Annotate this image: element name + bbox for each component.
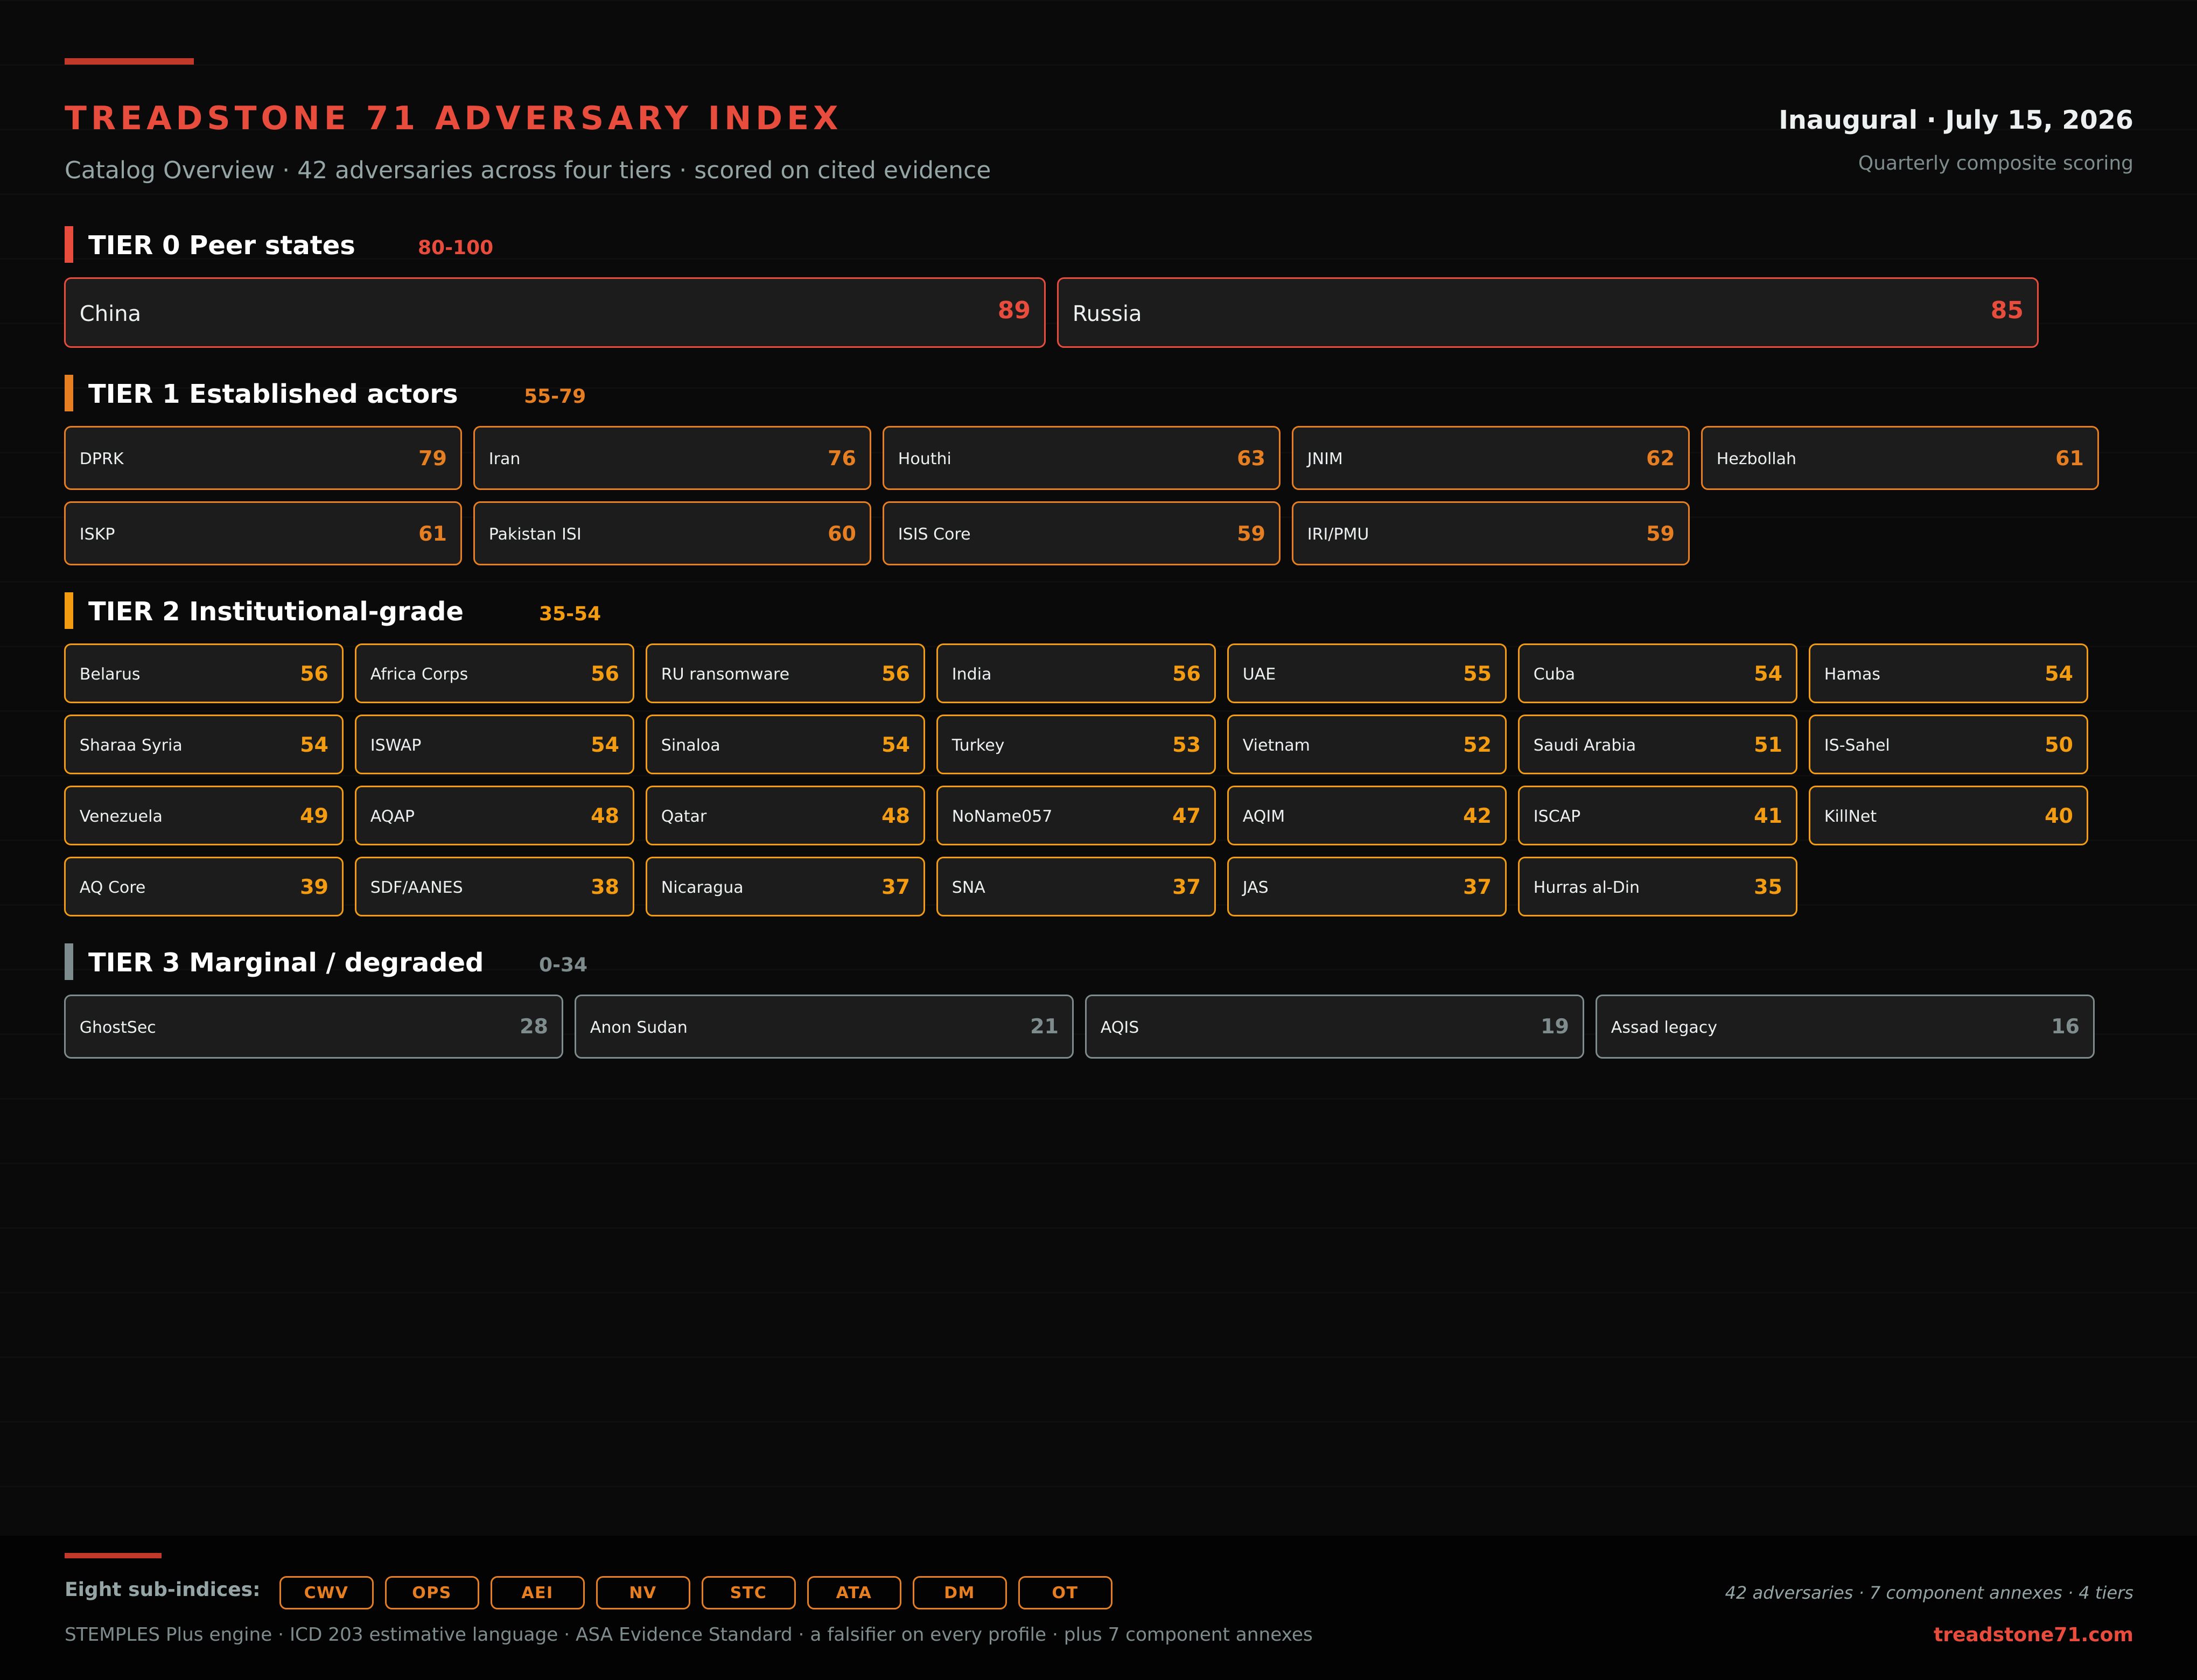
card: Hezbollah: Hezbollah [1717, 449, 1796, 468]
card: Cuba [1517, 643, 1797, 703]
card: Assad legacy: 16 [2051, 1014, 2080, 1038]
card: AQIS: AQIS [1101, 1018, 1139, 1037]
card: ISCAP: ISCAP [1534, 807, 1580, 826]
tier 0 heading: TIER 0 Peer states [88, 230, 355, 261]
card: Iran: Iran [489, 449, 520, 468]
card: Hezbollah: 61 [2055, 446, 2084, 470]
card: IS-Sahel: IS-Sahel [1824, 736, 1890, 755]
card: Anon Sudan [574, 994, 1074, 1059]
card: China: 89 [998, 297, 1031, 324]
card: Venezuela: 49 [300, 804, 328, 828]
card: JAS [1227, 856, 1507, 916]
card: Qatar [645, 785, 925, 845]
chip: NV: NV [629, 1584, 657, 1602]
chip: OT: OT [1052, 1584, 1078, 1602]
chip: DM [912, 1576, 1007, 1609]
card: KillNet [1808, 785, 2088, 845]
card: Russia [1056, 277, 2039, 348]
methodology line: STEMPLES Plus engine · ICD 203 estimative language · ASA Evidence Standard · a falsifier on every profile · plus 7 component annexes [65, 1624, 1313, 1646]
chip: AEI [490, 1576, 585, 1609]
card: GhostSec: 28 [520, 1014, 548, 1038]
card: India: 56 [1172, 662, 1201, 685]
card: Sinaloa [645, 714, 925, 774]
card: ISCAP: 41 [1754, 804, 1782, 828]
card: JNIM: JNIM [1307, 449, 1343, 468]
card: Assad legacy: Assad legacy [1611, 1018, 1717, 1037]
card: NoName057 [936, 785, 1216, 845]
card: Vietnam [1227, 714, 1507, 774]
chip: STC: STC [730, 1584, 767, 1602]
card: ISCAP [1517, 785, 1797, 845]
card: Turkey [936, 714, 1216, 774]
card: KillNet: KillNet [1824, 807, 1877, 826]
card: Hamas: Hamas [1824, 665, 1880, 684]
card: Cuba: 54 [1754, 662, 1782, 685]
card: GhostSec [64, 994, 563, 1059]
tier 0 marker [65, 226, 73, 263]
card: Vietnam: Vietnam [1243, 736, 1310, 755]
card: AQ Core [64, 856, 344, 916]
card: Sharaa Syria: 54 [300, 733, 328, 757]
card: SDF/AANES [354, 856, 634, 916]
panel: tier 2 [64, 592, 2088, 916]
subtitle: Catalog Overview · 42 adversaries across four tiers · scored on cited evidence [65, 157, 991, 184]
chip: AEI: AEI [521, 1584, 554, 1602]
panel: tier 0 [64, 226, 2039, 348]
card: Anon Sudan: Anon Sudan [590, 1018, 688, 1037]
card: AQIM: AQIM [1243, 807, 1285, 826]
tier 3 score range: 0-34 [539, 954, 587, 976]
card: AQAP: 48 [591, 804, 619, 828]
card: Belarus [64, 643, 344, 703]
card: Hezbollah [1701, 425, 2099, 490]
card: NoName057: NoName057 [952, 807, 1052, 826]
card: IS-Sahel: 50 [2045, 733, 2073, 757]
card: Turkey: Turkey [952, 736, 1004, 755]
card: Russia: Russia [1073, 302, 1142, 326]
card: Belarus: Belarus [80, 665, 141, 684]
card: Hamas [1808, 643, 2088, 703]
tier 2 score range: 35-54 [539, 603, 601, 625]
card: SDF/AANES: 38 [591, 875, 619, 899]
card: Saudi Arabia: 51 [1754, 733, 1782, 757]
card: Turkey: 53 [1172, 733, 1201, 757]
card: JAS: JAS [1243, 878, 1269, 897]
card: AQ Core: AQ Core [80, 878, 145, 897]
card: SNA: SNA [952, 878, 985, 897]
card: RU ransomware: 56 [881, 662, 910, 685]
card: SNA [936, 856, 1216, 916]
card: ISWAP: ISWAP [370, 736, 421, 755]
card: Pakistan ISI [473, 501, 871, 565]
card: Africa Corps: Africa Corps [370, 665, 468, 684]
card: Nicaragua: Nicaragua [661, 878, 744, 897]
card: IRI/PMU: IRI/PMU [1307, 524, 1369, 544]
card: Cuba: Cuba [1534, 665, 1575, 684]
card: AQIS [1084, 994, 1584, 1059]
card: Houthi: Houthi [898, 449, 951, 468]
tier 1 score range: 55-79 [524, 386, 586, 407]
card: DPRK [64, 425, 462, 490]
card: China [64, 277, 1046, 348]
card: ISWAP [354, 714, 634, 774]
card: ISIS Core: ISIS Core [898, 524, 971, 544]
card: IS-Sahel [1808, 714, 2088, 774]
card: SDF/AANES: SDF/AANES [370, 878, 463, 897]
card: AQIM [1227, 785, 1507, 845]
card: Venezuela: Venezuela [80, 807, 163, 826]
card: JNIM: 62 [1646, 446, 1675, 470]
card: Qatar: Qatar [661, 807, 706, 826]
card: Iran [473, 425, 871, 490]
date: Inaugural · July 15, 2026 [1779, 106, 2133, 135]
card: Saudi Arabia [1517, 714, 1797, 774]
card: RU ransomware [645, 643, 925, 703]
card: Houthi [882, 425, 1281, 490]
card: Africa Corps: 56 [591, 662, 619, 685]
tier 3 marker [65, 943, 73, 980]
card: IRI/PMU [1291, 501, 1690, 565]
accent bar [65, 58, 194, 65]
card: Venezuela [64, 785, 344, 845]
card: Sinaloa: 54 [881, 733, 910, 757]
card: Assad legacy [1595, 994, 2095, 1059]
card: Africa Corps [354, 643, 634, 703]
card: ISIS Core: 59 [1237, 522, 1265, 545]
card: Hurras al-Din: Hurras al-Din [1534, 878, 1640, 897]
tier 3 heading: TIER 3 Marginal / degraded [88, 948, 484, 978]
card: Hurras al-Din: 35 [1754, 875, 1782, 899]
chip: ATA: ATA [836, 1584, 872, 1602]
card: Houthi: 63 [1237, 446, 1265, 470]
card: JAS: 37 [1463, 875, 1492, 899]
card: Vietnam: 52 [1463, 733, 1492, 757]
card: KillNet: 40 [2045, 804, 2073, 828]
card: AQAP: AQAP [370, 807, 415, 826]
catalog counts: 42 adversaries · 7 component annexes · 4 tiers [1725, 1582, 2133, 1602]
card: AQIM: 42 [1463, 804, 1492, 828]
chip: STC [701, 1576, 796, 1609]
card: NoName057: 47 [1172, 804, 1201, 828]
card: Hurras al-Din [1517, 856, 1797, 916]
card: Iran: 76 [828, 446, 856, 470]
card: Qatar: 48 [881, 804, 910, 828]
card: RU ransomware: RU ransomware [661, 665, 789, 684]
card: Pakistan ISI: Pakistan ISI [489, 524, 582, 544]
chip: NV [596, 1576, 690, 1609]
chip: ATA [807, 1576, 901, 1609]
card: ISKP [64, 501, 462, 565]
panel: tier 3 [64, 943, 2095, 1059]
card: Sinaloa: Sinaloa [661, 736, 720, 755]
footer [0, 1536, 2197, 1680]
card: Sharaa Syria: Sharaa Syria [80, 736, 183, 755]
card: AQ Core: 39 [300, 875, 328, 899]
card: ISWAP: 54 [591, 733, 619, 757]
card: UAE: UAE [1243, 665, 1276, 684]
chip: OPS: OPS [412, 1584, 452, 1602]
title: TREADSTONE 71 ADVERSARY INDEX [65, 100, 842, 137]
sub-indices label: Eight sub-indices: [65, 1579, 261, 1600]
card: Hamas: 54 [2045, 662, 2073, 685]
chip: CWV [279, 1576, 374, 1609]
card: China: China [80, 302, 141, 326]
card: Nicaragua [645, 856, 925, 916]
card: India [936, 643, 1216, 703]
card: ISIS Core [882, 501, 1281, 565]
chip: CWV: CWV [304, 1584, 348, 1602]
card: ISKP: 61 [418, 522, 447, 545]
card: GhostSec: GhostSec [80, 1018, 156, 1037]
card: Russia: 85 [1991, 297, 2024, 324]
website: treadstone71.com [1934, 1623, 2133, 1646]
card: DPRK: DPRK [80, 449, 124, 468]
card: AQAP [354, 785, 634, 845]
card: Saudi Arabia: Saudi Arabia [1534, 736, 1636, 755]
card: IRI/PMU: 59 [1646, 522, 1675, 545]
footer accent bar [65, 1553, 162, 1558]
card: AQIS: 19 [1541, 1014, 1569, 1038]
cadence note: Quarterly composite scoring [1858, 152, 2133, 174]
card: Sharaa Syria [64, 714, 344, 774]
tier 2 heading: TIER 2 Institutional-grade [88, 597, 464, 627]
card: Anon Sudan: 21 [1030, 1014, 1059, 1038]
chip: OPS [384, 1576, 479, 1609]
card: UAE: 55 [1463, 662, 1492, 685]
chip: DM: DM [944, 1584, 975, 1602]
tier 1 marker [65, 375, 73, 411]
card: SNA: 37 [1172, 875, 1201, 899]
card: JNIM [1291, 425, 1690, 490]
card: Nicaragua: 37 [881, 875, 910, 899]
card: Pakistan ISI: 60 [828, 522, 856, 545]
card: UAE [1227, 643, 1507, 703]
header [65, 58, 2133, 184]
card: Belarus: 56 [300, 662, 328, 685]
panel: tier 1 [64, 375, 2099, 565]
tier 1 heading: TIER 1 Established actors [88, 379, 458, 409]
tier 2 marker [65, 592, 73, 629]
card: India: India [952, 665, 991, 684]
card: DPRK: 79 [418, 446, 447, 470]
card: ISKP: ISKP [80, 524, 115, 544]
tier 0 score range: 80-100 [418, 237, 493, 258]
chip: OT [1018, 1576, 1113, 1609]
